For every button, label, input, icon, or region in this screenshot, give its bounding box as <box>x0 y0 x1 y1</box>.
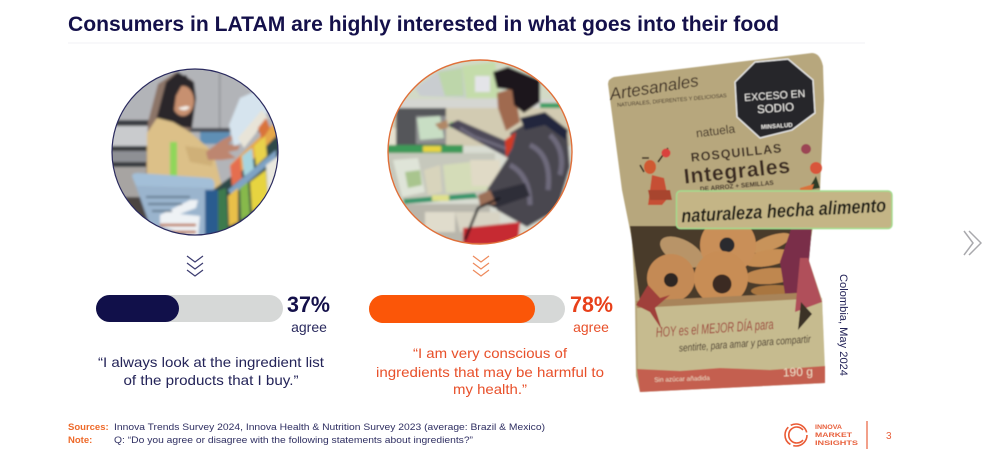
caption: Colombia, May 2024: Colombia, May 2024 <box>837 274 849 376</box>
page number: 3 <box>886 431 892 442</box>
quote: harmful ingredients <box>376 345 604 397</box>
pack text: HOY es el MEJOR DÍA para <box>655 316 774 340</box>
title: Consumers in LATAM are highly interested in what goes into their food <box>68 12 779 36</box>
photo: woman shopping with basket <box>111 68 279 236</box>
panel: conscious of harmful ingredients <box>369 55 613 397</box>
pack text: sentirte, para amar y para compartir <box>679 333 811 355</box>
footer: sources and note: Q: “Do you agree or disagree with the following statements about ingredients?” <box>114 435 473 446</box>
footer: sources and note: Innova Trends Survey 2024, Innova Health & Nutrition Survey 2023 (average: Brazil & Mexico) <box>114 422 545 433</box>
value: 37% agree: 37% <box>287 292 330 317</box>
photo: man reaching for shelf <box>387 59 573 245</box>
value: 37% agree: agree <box>291 319 327 335</box>
logo: Innova Market Insights: INNOVA <box>815 425 843 431</box>
product: snack pouch <box>607 53 892 392</box>
callout: brand slogan: naturaleza hecha alimento <box>681 196 887 227</box>
pack text: NATURALES, DIFERENTES Y DELICIOSAS <box>617 93 727 109</box>
pack text <box>607 71 813 384</box>
logo: Innova Market Insights: INSIGHTS <box>815 441 858 447</box>
pack text: natuela <box>695 122 736 140</box>
pack text: Artesanales <box>607 71 700 104</box>
icon: double chevron down orange <box>473 256 489 276</box>
footer: sources and note: Note: <box>68 435 92 446</box>
character illustration <box>640 144 822 205</box>
bar: 37% agree <box>96 295 283 322</box>
quote: ingredient list: of the products that I buy.” <box>124 372 299 388</box>
quote: ingredient list: “I always look at the ingredient list <box>98 354 324 370</box>
quote: ingredient list <box>98 354 324 388</box>
pouch body <box>608 53 825 392</box>
value: 78% agree: 78% <box>570 292 613 317</box>
value: 37% agree <box>287 292 330 335</box>
quote: harmful ingredients: my health.” <box>453 381 527 397</box>
cookie window <box>630 226 812 300</box>
pack text: DE ARROZ + SEMILLAS <box>700 180 775 193</box>
panel: ingredient list shopper <box>96 62 330 388</box>
pack text: 190 g <box>783 364 813 380</box>
logo: Innova Market Insights <box>785 421 867 449</box>
quote: harmful ingredients: “I am very conscious of <box>413 345 567 361</box>
logo: Innova Market Insights: MARKET <box>815 433 852 439</box>
arrow: next slide <box>964 231 981 255</box>
front of pack warning octagon: EXCESO EN <box>744 88 806 104</box>
quote: harmful ingredients: ingredients that may be harmful to <box>376 364 604 380</box>
pack text: Sin azúcar añadida <box>654 375 710 384</box>
lower band and flowers <box>636 258 825 392</box>
front of pack warning octagon: SODIO <box>757 102 795 116</box>
front of pack warning octagon: MINSALUD <box>761 123 794 131</box>
icon: double chevron down <box>187 256 203 276</box>
pack text: Integrales <box>683 154 792 189</box>
value: 78% agree <box>570 292 613 335</box>
footer: sources and note: Sources: <box>68 422 109 433</box>
bar: 78% agree <box>369 295 565 323</box>
pack text: ROSQUILLAS <box>690 141 783 165</box>
footer: sources and note <box>68 422 545 446</box>
front of pack warning octagon <box>735 59 815 138</box>
value: 78% agree: agree <box>573 319 609 335</box>
